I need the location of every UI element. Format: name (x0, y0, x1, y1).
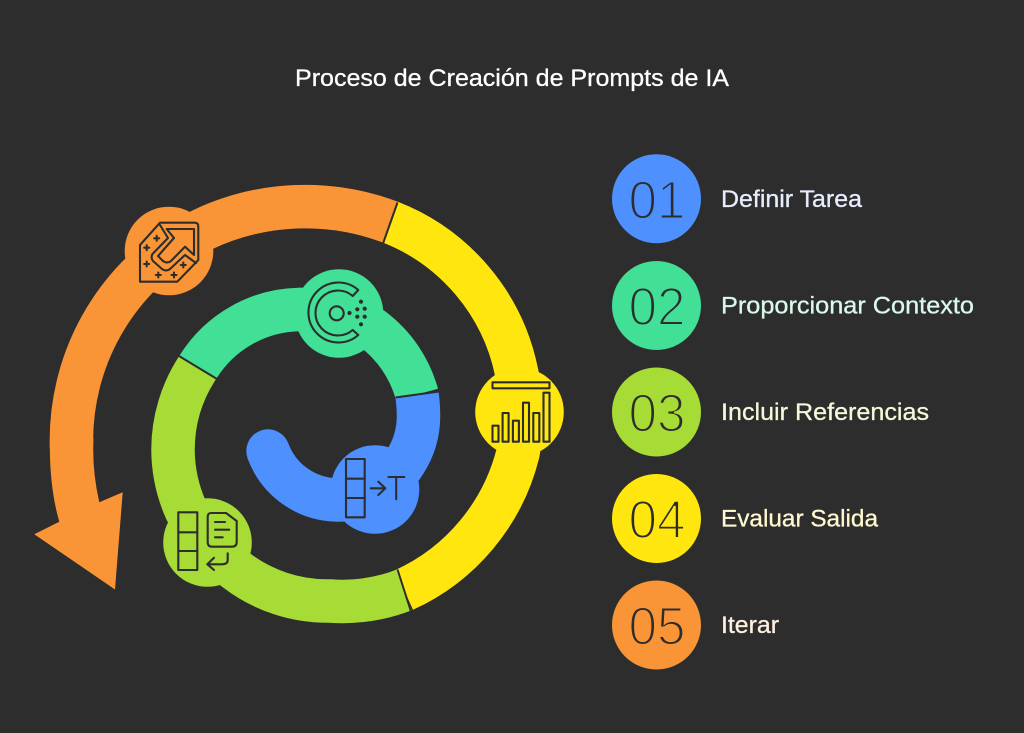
orange spiral segment with arrow: Iterar (34, 207, 390, 590)
title: Proceso de Creación de Prompts de IA (295, 65, 729, 92)
yellow spiral segment: Evaluar Salida (390, 222, 564, 590)
legend item 05: 05 (628, 596, 686, 656)
legend item 01: Definir Tarea (721, 186, 863, 213)
green spiral segment: Proporcionar Contexto (198, 269, 417, 394)
icon: table to text (346, 459, 404, 517)
icon: concentric C with dots (308, 282, 367, 342)
legend item 03: Incluir Referencias (721, 399, 929, 426)
icon: bar chart (492, 382, 550, 442)
icon: table and document with return arrow (178, 512, 237, 570)
legend item 04: 04 (628, 490, 686, 550)
lime spiral segment: Incluir Referencias (163, 367, 404, 601)
legend item 04 (612, 474, 879, 563)
blue spiral segment: Definir Tarea (246, 394, 419, 534)
legend item 02: 02 (628, 277, 686, 337)
legend item 03: 03 (628, 384, 686, 444)
legend item 01 (612, 154, 863, 243)
spiral diagram (34, 202, 564, 612)
legend item 01: 01 (628, 170, 686, 230)
icon: upward arrow on tag (140, 223, 198, 282)
legend item 05: Iterar (721, 612, 779, 639)
legend item 03 (612, 368, 929, 456)
legend item 02 (612, 261, 974, 350)
legend item 02: Proporcionar Contexto (721, 292, 974, 319)
legend item 04: Evaluar Salida (721, 506, 879, 532)
legend item 05 (612, 580, 779, 670)
